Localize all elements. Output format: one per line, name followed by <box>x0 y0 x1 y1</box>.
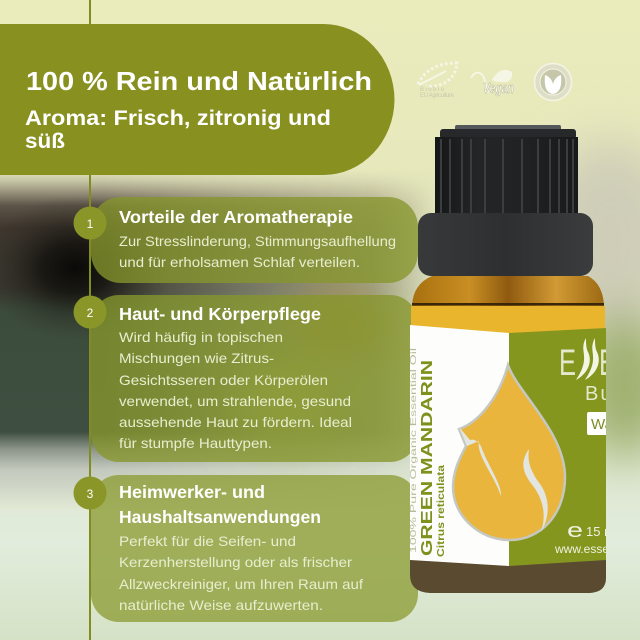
panel 3 text: Heimwerker- und <box>119 482 265 502</box>
step number 3 <box>74 476 106 510</box>
label text: brand: Wa <box>591 416 614 433</box>
label text: product names: 100% Pure Organic Essential Oil <box>408 348 418 553</box>
panel 1 text <box>119 207 396 270</box>
panel 3 text <box>119 482 363 613</box>
product bottle <box>408 125 617 593</box>
panel 1: aromatherapy <box>74 197 418 283</box>
icon: organic leaf <box>418 63 457 99</box>
step number 2 <box>74 296 106 328</box>
subtitle: süß <box>25 130 65 153</box>
glass shoulder <box>412 276 604 306</box>
icon: vegan: Vegan <box>483 80 514 97</box>
label text: brand: 15 m <box>586 524 615 539</box>
panel 1 text: und für erholsamen Schlaf verteilen. <box>119 254 360 270</box>
background <box>0 129 640 640</box>
icon: cruelty free rabbit <box>534 64 572 100</box>
certification icons <box>418 63 457 99</box>
panel 3: home and household <box>74 475 418 622</box>
panel 2 text: Mischungen wie Zitrus- <box>119 350 274 366</box>
panel 3 text: Perfekt für die Seifen- und <box>119 533 296 549</box>
panel 2 text: verwendet, um strahlende, gesund <box>119 393 351 409</box>
subtitle <box>25 107 331 153</box>
panel 2 text: Gesichtsseren oder Körperölen <box>119 372 328 388</box>
panel 1 text: Zur Stresslinderung, Stimmungsaufhellung <box>119 233 396 249</box>
icon: organic leaf: Biobio <box>420 87 445 93</box>
subtitle: Aroma: Frisch, zitronig und <box>25 107 331 130</box>
step number 2: 2 <box>87 306 94 320</box>
label text: brand: Bu <box>585 383 613 405</box>
label text: brand: E <box>599 342 616 383</box>
panel 2 text: Haut- und Körperpflege <box>119 304 321 324</box>
label text: brand <box>555 338 606 553</box>
header panel <box>0 24 395 175</box>
label text: brand: www.essen <box>554 542 616 556</box>
drop emblem <box>453 365 565 540</box>
step number 1 <box>74 206 106 240</box>
label text: product names: GREEN MANDARIN <box>419 360 436 556</box>
panel 1 text: Vorteile der Aromatherapie <box>119 207 353 227</box>
label text: product names: Citrus reticulata <box>436 464 447 557</box>
title: 100 % Rein und Natürlich <box>26 66 372 96</box>
panel 3 text: Haushaltsanwendungen <box>119 507 321 527</box>
timeline vertical line <box>89 0 91 640</box>
panel 2: skin and body care <box>74 295 418 462</box>
bottle base <box>410 555 606 593</box>
panel 2 text: Wird häufig in topischen <box>119 329 283 345</box>
label: white <box>410 325 509 566</box>
label text: brand: E <box>559 342 576 383</box>
panel 3 text: natürliche Weise aufzuwerten. <box>119 597 323 613</box>
panel 2 text: für stumpfe Hauttypen. <box>119 435 272 451</box>
step number 3: 3 <box>87 487 94 501</box>
icon: organic leaf: EU Agriculture <box>420 93 455 99</box>
label text: brand: e <box>567 520 583 542</box>
label text: product names <box>408 348 447 557</box>
step number 1: 1 <box>87 217 94 231</box>
panel 3 text: Kerzenherstellung oder als frischer <box>119 554 352 570</box>
panel 3 text: Allzweckreiniger, um Ihren Raum auf <box>119 576 363 592</box>
label: green <box>509 328 606 566</box>
icon: vegan <box>471 70 514 97</box>
bottle cap <box>418 125 593 276</box>
panel 2 text: aussehende Haut zu fördern. Ideal <box>119 414 352 430</box>
panel 2 text <box>119 304 352 451</box>
